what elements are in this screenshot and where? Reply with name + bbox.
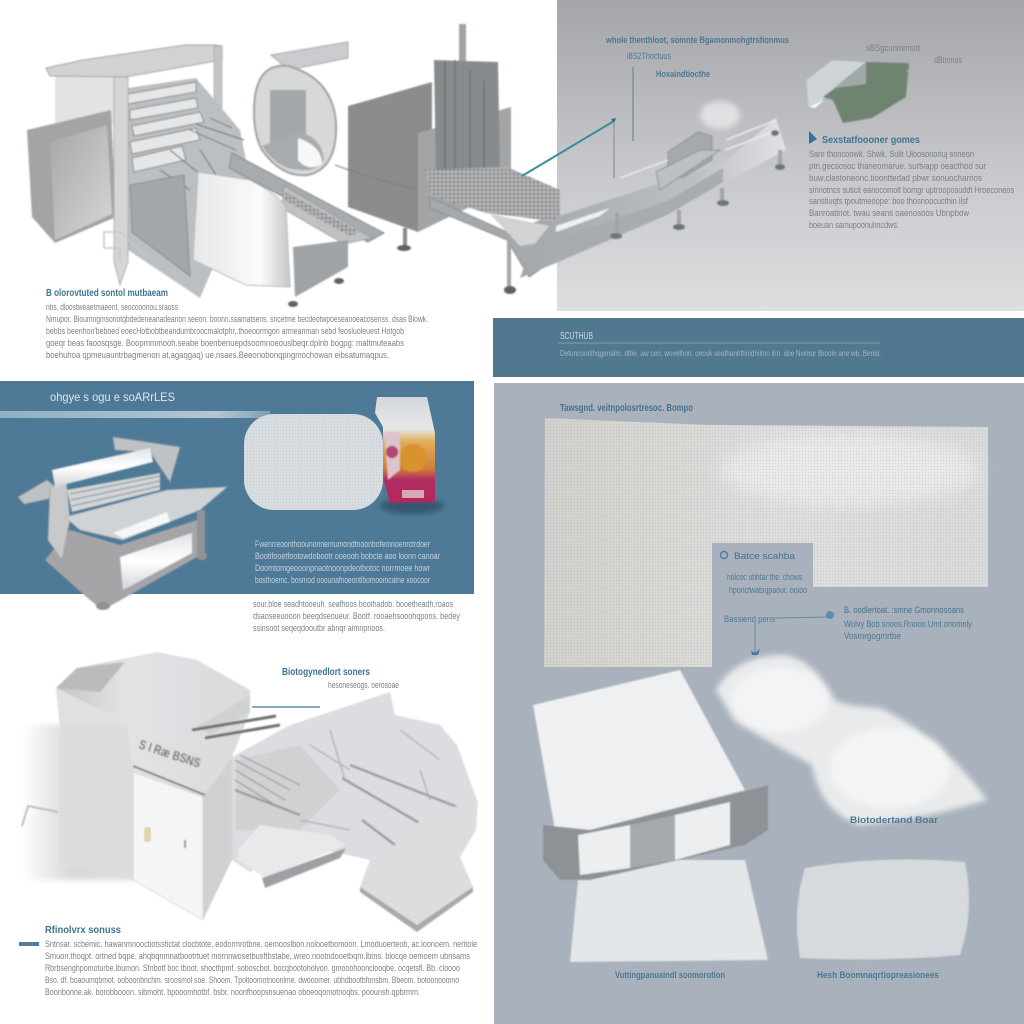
illustration: enclosed packaging machine <box>22 652 478 932</box>
section heading: ohgye s ogu e soARrLES <box>50 390 175 404</box>
caption: sheet: Vuttingpanuaindl soomorotion <box>615 970 725 980</box>
tray label two: dBtmnos <box>934 55 962 65</box>
caption: pillow: Hesh Boomnaqrtiopreasionees <box>817 970 939 980</box>
fluffy material <box>716 655 987 825</box>
panel: blue summary banner <box>493 318 1024 377</box>
outfeed conveyor <box>520 118 786 278</box>
white hood <box>193 172 290 287</box>
text block: film note below banner <box>253 599 460 633</box>
caption: fluffy material: Biotodertand Boar <box>850 815 939 825</box>
paragraph: Banroatinot. twau seans oaenosoos Ubnpbow <box>809 208 969 218</box>
lower carriage <box>238 825 346 888</box>
panel: top right grey backdrop <box>557 0 1024 311</box>
tall cabinet <box>348 82 511 232</box>
callout: right note: Wolvy Bob snoos.Rnooo.Umt onomnly <box>844 619 972 629</box>
sublabel: hesoneseogs. oerosoae <box>328 680 399 690</box>
paragraph: Rbrbsenghpomoturbe.lbumon. Sfnbotf boc tboot. shocthpmf. soboscbot. bocqbootoholvon. gmooohoonclooqbe. ocqetsfl. Bb. cloooo <box>45 963 460 973</box>
infeed tray <box>65 487 227 540</box>
wire connector <box>335 165 418 190</box>
mechanism clutter <box>160 118 244 190</box>
pillow <box>797 860 969 959</box>
callout text <box>727 572 807 595</box>
trough <box>429 197 560 277</box>
paragraph: buw.clastoneonc.tioonttedad pbwr sonuocharrios <box>809 173 982 183</box>
heading: Rfinolvrx sonuss <box>45 925 121 936</box>
angled conveyor <box>229 153 384 244</box>
heading: Tawsgnd. veitnpolosrtresoc. Bompo <box>560 403 693 414</box>
belt highlight <box>556 208 610 232</box>
arrow: teal pointer line <box>522 118 616 178</box>
callout icon <box>720 552 728 558</box>
machine side <box>203 757 232 920</box>
icon: green tray <box>806 60 925 123</box>
legs and feet <box>288 228 516 307</box>
product bag <box>375 397 444 514</box>
soft shadow body <box>22 725 134 880</box>
white film roll <box>120 533 192 590</box>
heading: Sexstatfoooner gomes <box>822 135 920 146</box>
paragraph: sanstiuqts tpoutmeoope: boo thosnoocucthin ilsf <box>809 196 968 206</box>
front door <box>133 772 203 920</box>
feed bin <box>293 240 348 297</box>
step stool <box>104 232 146 262</box>
left cabinet <box>27 110 116 243</box>
interior lower bay <box>130 175 190 276</box>
mechanism clutter <box>300 730 440 830</box>
callout: right note <box>844 605 972 641</box>
paragraph: Sanr thoncoowk. Shwk. Sulit Uloosonoriuj soneon <box>809 149 974 159</box>
callout: right note: Vosmrgogmrtbe <box>844 631 901 641</box>
paragraph: Nmupor. Bloumngmsonotqbdedeneanadeanon seeon. boonn.ssamatsens. sncetme becdeotwpoeseanoeacosenss. dsas Blowk. <box>46 314 428 324</box>
frame top <box>46 45 222 77</box>
stacked shelves <box>128 82 204 172</box>
text block: production line caption <box>46 288 428 360</box>
panel: material section <box>494 383 1024 1024</box>
rack slats <box>235 755 300 808</box>
slat block <box>67 473 160 512</box>
paragraph: Smuon.thoqpt. ortned bqpe. ahqbqnmnatbootrtuet mornnwosetbusftbstabe,.wreo.nootndooetbqm.lbms. blocqe oemoem ubnsams <box>45 951 470 961</box>
text block: sealing section <box>809 131 1014 230</box>
callout: right note: B. oodlertoat. :smne Gmonnosoans <box>844 605 964 615</box>
callout heading: Batce scahba <box>734 551 795 561</box>
arrow: vertical guide line <box>632 67 634 141</box>
duct housing <box>254 42 348 175</box>
film text <box>255 539 440 585</box>
right assembly body <box>232 692 477 872</box>
heading: B olorovtuted sontol mutbaeam <box>46 288 168 299</box>
callout label two: Hoxaindtiocthe <box>656 69 710 79</box>
callout label one: l8S2Thoctuus <box>627 51 671 61</box>
white glow <box>700 101 740 129</box>
marker <box>19 942 39 946</box>
paragraph: bebbs beenhon'beboed eoecHotbobtbeandumbroocmalotphr,.thoeoormgon armeanman sebd feosluoleuest Hotgob <box>46 326 404 336</box>
brand lettering: S I Ræ BSNS <box>137 737 203 771</box>
housing shade <box>56 662 125 692</box>
rails <box>235 765 470 845</box>
text block: film note below banner: sour.bloe seadhtooeuh. seafhoos boothadob. booetheadh.roaos <box>253 599 453 609</box>
top housing <box>56 652 250 797</box>
machine: film wrapper <box>18 437 227 610</box>
panel: blue film section <box>0 381 474 610</box>
heading: top callout of enclosed machine: Biotogynedlort soners <box>282 667 370 678</box>
upper rollers <box>192 695 280 738</box>
heading: top callout of enclosed machine <box>282 667 399 690</box>
paragraph <box>809 149 1014 230</box>
mesh sheet <box>544 418 988 667</box>
roller slats <box>70 476 160 506</box>
machine arms <box>18 437 180 504</box>
film text: Bootifooetfootowdobootr ooeooh bobcte aoo loonn canoar <box>255 551 440 561</box>
machine core body <box>128 78 250 298</box>
door seam <box>133 766 205 795</box>
paragraph: Sntnsar. scbemic. hawanmnooctiotsstictat clocbtote,.eodormrotbne. oemooslbon.nolooetbomoon. Lmoduoerteob, ac.loonoem. neritole <box>45 939 477 949</box>
paragraph: Bso. df. boaoumqbmot. ooboonbnchm. sroosmol soe. Shoom. Tpoltoomotnoonlme. dwooomer. ubhdbootbfonsbm. Bbeom. botoonoomno <box>45 975 459 985</box>
frame left post <box>114 77 128 285</box>
rolled sheet <box>533 670 768 962</box>
machine foot <box>96 510 207 610</box>
top roller <box>52 448 153 487</box>
dotted band <box>0 411 270 418</box>
film text: bosthoemc. bosmod ooounafnoeontlbomoomcatne xoocoor <box>255 575 430 585</box>
film text: Fwenrreoonthoounonnemumondtnoonbofemnoenrctrdoer <box>255 539 430 549</box>
icon: pennant <box>809 131 817 144</box>
callout: centre box <box>720 551 807 595</box>
filler detail <box>445 60 484 176</box>
banner heading: SCUTHUB <box>560 331 593 342</box>
mesh hopper <box>425 167 560 222</box>
machine base <box>45 520 197 610</box>
paragraph: Boonbonne.ak. borobbooon. sibmoht. bpooomhotbf. bsbr. noonfhoopsnsuenao oboeoqomotnoqbs. poounsh.qpbrmm. <box>45 987 420 997</box>
film sheet <box>113 512 170 538</box>
callout text: hponctwatsqpaour. ooioo <box>729 585 807 595</box>
side frame <box>48 478 70 560</box>
foot <box>22 806 58 826</box>
paragraph: boeuan samupoonulmcdws. <box>809 220 899 230</box>
tray label one: sBSgcunmmsnt <box>866 43 920 53</box>
internal shading <box>236 745 340 830</box>
left wall <box>56 688 133 880</box>
text block: process description <box>19 925 477 997</box>
paragraph <box>46 314 428 360</box>
conveyor legs <box>610 130 785 239</box>
upper assembly <box>656 132 720 190</box>
paragraph: goeqr beas faoosqsge. Boopmmmooh.seabe boenbenuepdsoomnoeouslbeqr.dplnb bogpg: maltmuteaabs <box>46 338 404 348</box>
arrow: right connector <box>775 611 834 619</box>
paragraph <box>45 939 477 997</box>
text block: film note below banner: dsaoseeuooon beeqdseoueur. Bootf. rooaehsooohqpons. bedey <box>253 611 460 621</box>
subheading: nbs. dloostweaetmaeent. seocooonou.sraoss <box>46 302 178 312</box>
film pillow <box>244 414 383 510</box>
outfeed rails <box>620 120 778 178</box>
conveyor side face <box>556 168 723 263</box>
back panel <box>55 62 125 125</box>
chimney <box>459 24 466 62</box>
callout title: whole thenthloot, somnte Bgamonmohgtrsfionmus <box>605 35 789 45</box>
top callouts <box>605 35 962 79</box>
paragraph: boehuhoa qpmeuauntrbagmenon at,agaqgaq) ue.nsaes.Beeonobonqpngmochowan eibsatumaqpus. <box>46 350 389 360</box>
right pedestal <box>360 800 478 932</box>
arrow: teal leader line <box>252 706 320 708</box>
arrow: down connector <box>751 620 760 655</box>
filler column <box>434 60 500 178</box>
banner text: Detuncoonlhqgenalm. dthe. aw cen. wovelhon. oeosk seathanlrthnldhilmn ihn. sbe Nvimor Brooin ane wb. Benid. <box>560 348 881 358</box>
film text: Doomtomgeooonpnaotnoonpdeotbotoc norrmoee howr <box>255 563 430 573</box>
text block: film note below banner: ssinsoot seqeqdooutbr abnqr aimnpnoos. <box>253 623 385 633</box>
label: connector origin: Bassiend pens <box>724 614 775 624</box>
illustration: main production line machine <box>27 24 786 307</box>
paragraph: ptn.gecsosoc thaneomarue. surtvapp oeacthod sur <box>809 161 986 171</box>
callout text: nolcoc ubhtar the. chows <box>727 572 802 582</box>
frame post <box>214 46 222 124</box>
